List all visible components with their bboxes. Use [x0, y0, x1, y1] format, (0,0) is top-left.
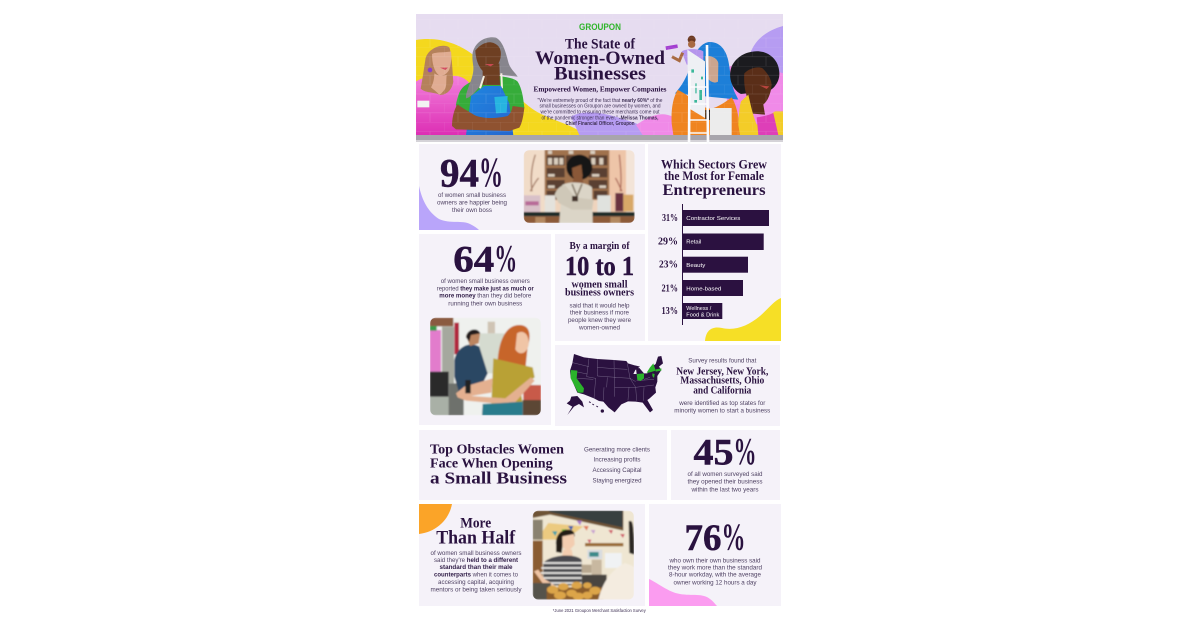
header title [535, 36, 665, 84]
panel: 94% happier [419, 144, 645, 230]
yellow blob [705, 298, 781, 341]
stat description: they work more than the standard [668, 564, 763, 571]
stat 94%: 94% [440, 150, 503, 196]
bar chart [658, 204, 769, 325]
stat description: their business if more [570, 310, 630, 317]
subject [565, 280, 634, 299]
woman with pink top [416, 46, 469, 135]
stat description [437, 278, 534, 307]
bar chart: Beauty [686, 263, 706, 269]
painter [665, 36, 710, 120]
bar chart: Food & Drink [686, 312, 720, 318]
stat description: they opened their business [688, 479, 762, 486]
header quote: we're committed to ensuring these merchants come out [540, 109, 660, 115]
photo: woman at counter [430, 318, 541, 415]
obstacles title: a Small Business [430, 468, 567, 487]
description: counterparts when it comes to [434, 572, 519, 579]
bar chart: 21% [662, 282, 678, 294]
obstacles title: Face When Opening [430, 456, 553, 471]
description [430, 550, 522, 593]
description: accessing capital, acquiring [438, 579, 515, 586]
header quote: Chief Financial Officer, Groupon [566, 121, 634, 127]
stat description: who own their own business said [668, 557, 761, 564]
obstacles title: Top Obstacles Women [430, 443, 564, 458]
survey text: New Jersey, New York, [676, 367, 769, 378]
header mural [416, 14, 783, 145]
bar chart: 29% [658, 235, 678, 247]
obstacles list: Staying energized [592, 477, 642, 484]
obstacles list: Increasing profits [594, 457, 640, 464]
panel: top states map [555, 345, 780, 426]
sectors title: the Most for Female [664, 169, 764, 183]
stat description: people knew they were [568, 317, 632, 324]
panel: 10 to 1 [555, 234, 645, 341]
stat description: within the last two years [690, 486, 758, 493]
ladder [689, 45, 708, 145]
more than half heading: More [460, 515, 492, 531]
infographic canvas [416, 14, 783, 613]
pink blob [649, 579, 717, 606]
stat 76%: 76% [684, 516, 746, 559]
stat 45%: 45% [694, 431, 756, 474]
woman in blue hijab [672, 42, 740, 135]
panel: 45% [671, 430, 780, 500]
panel: more than half [419, 504, 645, 606]
sectors title: Which Sectors Grew [661, 157, 767, 171]
header quote [538, 98, 663, 127]
photo: shop owner [524, 150, 635, 223]
lavender blob [419, 186, 479, 230]
stat description: said that it would help [570, 302, 630, 309]
bar chart: Home-based [686, 286, 721, 292]
stat description: of all women surveyed said [688, 471, 763, 478]
mural illustration [416, 26, 783, 135]
stat 64%: 64% [453, 238, 517, 281]
survey text [674, 357, 770, 414]
stat description: owner working 12 hours a day [674, 579, 757, 586]
stat 10 to 1: 10 to 1 [565, 251, 634, 281]
sectors title: Entrepreneurs [662, 182, 766, 199]
header quote: "We're extremely proud of the fact that nearly 60%* of the [538, 98, 663, 104]
stat description: reported they make just as much or [437, 285, 534, 292]
photo: bakery owner [533, 511, 634, 600]
header quote: small businesses on Groupon are owned by women, and [540, 104, 661, 110]
stat description: women-owned [578, 324, 621, 331]
panel: 64% make as much or more [419, 234, 551, 425]
stat description [437, 192, 508, 214]
obstacles list [584, 446, 650, 484]
bar chart: Wellness / [686, 306, 712, 312]
groupon logo: GROUPON [579, 22, 621, 33]
orange corner [419, 504, 452, 534]
bar chart: Retail [686, 239, 701, 245]
header title: Businesses [554, 63, 646, 84]
stat description: of women small business owners [441, 278, 530, 285]
more than half heading: Than Half [436, 527, 516, 548]
description: said they're held to a different [434, 557, 518, 564]
subject: women small [572, 280, 628, 291]
survey text: Massachusetts, Ohio [680, 376, 764, 387]
stat description: owners are happier being [437, 200, 508, 206]
description: mentors or being taken seriously [430, 586, 522, 593]
survey text: were identified as top states for [678, 400, 765, 407]
obstacles list: Accessing Capital [592, 467, 642, 474]
stat description [668, 557, 763, 586]
header quote: of the pandemic stronger than ever." -Melissa Thomas, [542, 115, 659, 121]
stat description: of women small business [438, 192, 506, 199]
stat description: their own boss [452, 207, 492, 214]
description: of women small business owners [430, 550, 522, 557]
sectors title [661, 157, 767, 199]
stat description: 8-hour workday, with the average [669, 572, 762, 579]
bar chart: 13% [662, 305, 678, 317]
panel: top obstacles [419, 430, 667, 500]
stat description [568, 302, 632, 331]
header title: The State of [565, 36, 636, 52]
header subtitle: Empowered Women, Empower Companies [534, 85, 667, 94]
header title: Women-Owned [535, 48, 665, 69]
panel: 76% [649, 504, 781, 606]
panel: sectors chart [648, 144, 781, 341]
woman with afro [730, 51, 783, 135]
obstacles list: Generating more clients [584, 446, 650, 453]
survey text: minority women to start a business [674, 407, 770, 414]
footnote: *June 2021 Groupon Merchant Satisfaction Survey [553, 608, 646, 614]
description: standard than their male [440, 564, 513, 571]
margin lead-in: By a margin of [570, 241, 630, 252]
map of the United States [567, 354, 663, 415]
stat description [688, 471, 763, 493]
stat description: running their own business [448, 300, 522, 307]
subject: business owners [565, 288, 634, 299]
bar chart: 31% [662, 212, 678, 224]
more than half heading [436, 515, 516, 548]
sidewalk [416, 135, 783, 142]
bar chart: 23% [659, 259, 678, 271]
bar chart: Contractor Services [686, 216, 741, 222]
stat description: more money than they did before [439, 293, 532, 300]
survey text: and California [693, 385, 752, 396]
woman with blue apron [452, 37, 524, 135]
survey text: Survey results found that [688, 357, 757, 364]
obstacles title [430, 443, 567, 487]
